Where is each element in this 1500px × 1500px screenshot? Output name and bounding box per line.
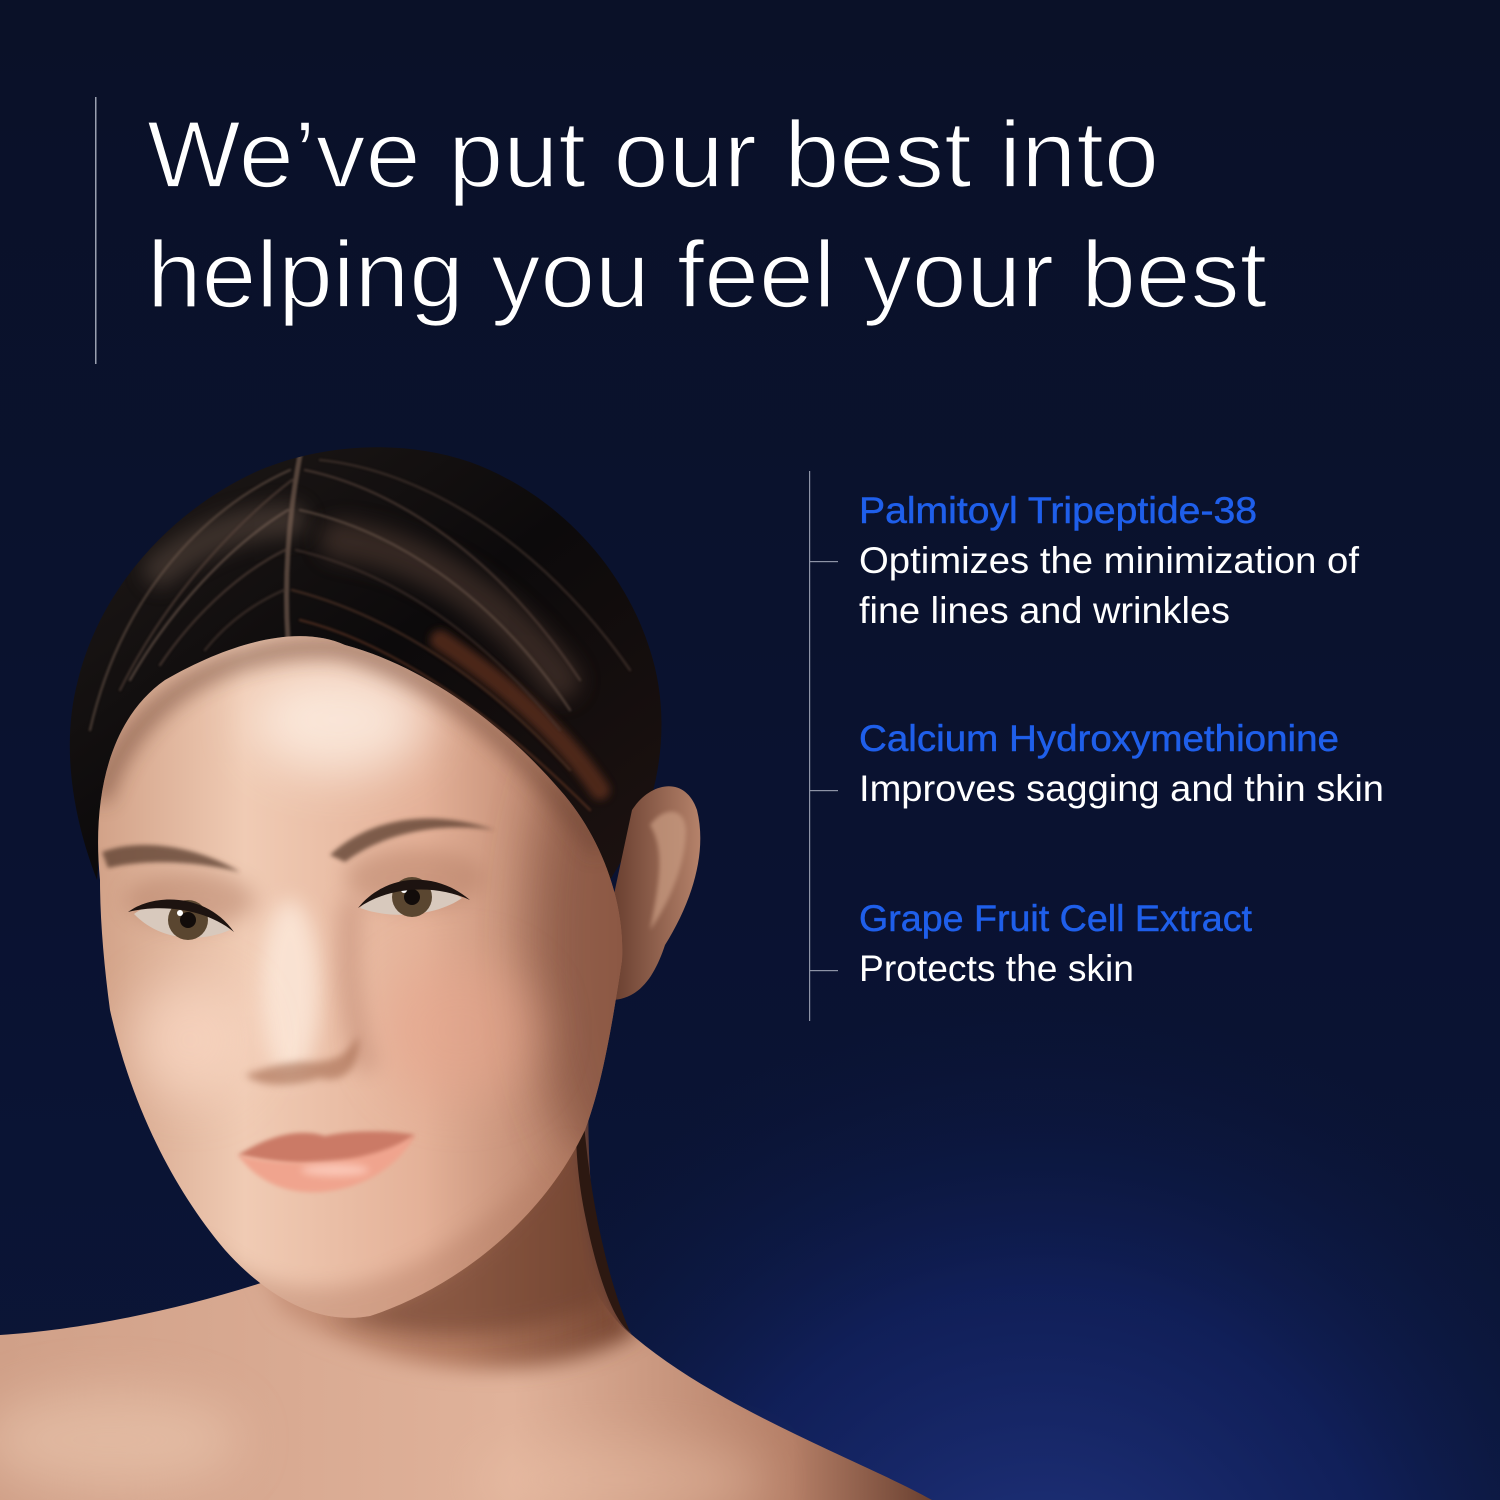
ingredient: Grape Fruit Cell Extract: Grape Fruit Cell Extract bbox=[859, 898, 1253, 939]
shoulders bbox=[0, 1200, 932, 1500]
ear bbox=[600, 786, 700, 1000]
eye: right bbox=[358, 877, 470, 917]
portrait of woman bbox=[0, 447, 932, 1500]
eyebrow: right bbox=[330, 818, 495, 862]
hairline shadow bbox=[100, 647, 600, 850]
hair sheen and strands bbox=[90, 455, 630, 810]
ingredient: Palmitoyl Tripeptide-38: Optimizes the minimization of bbox=[859, 540, 1360, 581]
ingredient: Palmitoyl Tripeptide-38 bbox=[859, 490, 1360, 631]
ingredient: Calcium Hydroxymethionine: Calcium Hydroxymethionine bbox=[859, 718, 1339, 759]
ingredient: Palmitoyl Tripeptide-38: Palmitoyl Tripeptide-38 bbox=[859, 490, 1257, 531]
ingredient: Calcium Hydroxymethionine: Improves sagging and thin skin bbox=[859, 768, 1384, 809]
title: We’ve put our best into bbox=[147, 102, 1159, 208]
ingredient: Palmitoyl Tripeptide-38: fine lines and wrinkles bbox=[859, 590, 1230, 631]
eye: left bbox=[128, 899, 234, 940]
hair mass bbox=[70, 447, 661, 880]
ponytail bbox=[576, 1110, 630, 1332]
title: helping you feel your best bbox=[147, 222, 1267, 328]
face shading bbox=[100, 636, 622, 1318]
ingredient: Calcium Hydroxymethionine bbox=[859, 718, 1384, 809]
neck bbox=[266, 1120, 641, 1381]
heading rule bbox=[95, 97, 96, 364]
face bbox=[98, 636, 622, 1318]
nose bbox=[245, 1035, 359, 1085]
eye socket shadows bbox=[125, 872, 255, 928]
ingredient bracket bbox=[809, 471, 838, 1021]
eyebrow: left bbox=[102, 845, 240, 872]
shoulder highlight bbox=[0, 1390, 240, 1490]
title bbox=[147, 102, 1267, 328]
nose side shadow bbox=[349, 900, 368, 1070]
ingredient: Grape Fruit Cell Extract: Protects the skin bbox=[859, 948, 1134, 989]
ingredient: Grape Fruit Cell Extract bbox=[859, 898, 1253, 989]
lips bbox=[238, 1131, 415, 1192]
